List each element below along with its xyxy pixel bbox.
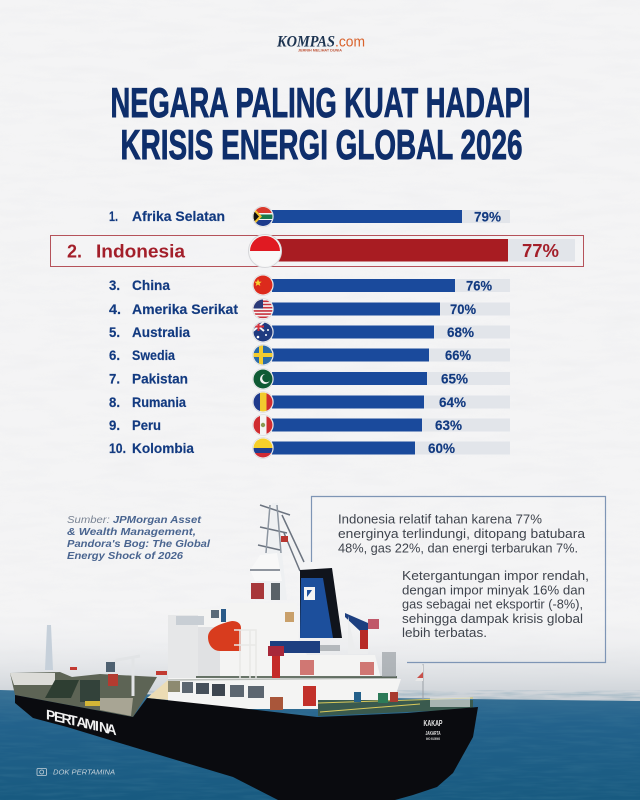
door and aft deck machinery bbox=[270, 664, 473, 716]
paragraph: low import dependency: gas sebagai net eksportir (-8%), bbox=[402, 598, 583, 612]
deck windows bbox=[168, 681, 264, 698]
source citation: Sumber: JPMorgan Asset bbox=[67, 514, 202, 526]
row 4: Amerika Serikat 70%: 70% bbox=[450, 301, 477, 317]
row 8: Rumania 64%: 64% bbox=[439, 394, 467, 410]
row 7: Pakistan 65%: 65% bbox=[441, 370, 469, 386]
sea background bbox=[0, 690, 640, 800]
row 7: Pakistan 65% bbox=[109, 369, 510, 389]
source citation: & Wealth Management, bbox=[67, 526, 196, 538]
paragraph: energy protection: energinya terlindungi, ditopang batubara bbox=[338, 527, 585, 541]
row 3: China 76%: China bbox=[132, 278, 170, 293]
row 10: Kolombia 60%: 60% bbox=[428, 440, 456, 456]
stern name: KAKAP JAKARTA: KAKAP bbox=[424, 719, 443, 728]
paragraph: low import dependency: sehingga dampak krisis global bbox=[402, 612, 583, 626]
row 5: Australia 68%: Australia bbox=[132, 325, 190, 340]
logo: Kompas.com: JERNIH MELIHAT DUNIA bbox=[298, 48, 342, 52]
paragraph: low import dependency bbox=[402, 569, 589, 640]
row 4: Amerika Serikat 70%: Amerika Serikat bbox=[132, 302, 239, 317]
row 5: Australia 68%: 68% bbox=[447, 324, 475, 340]
row 1: Afrika Selatan 79%: Afrika Selatan bbox=[132, 209, 225, 224]
paragraph: energy protection: Indonesia relatif tahan karena 77% bbox=[338, 512, 542, 526]
paragraph: low import dependency: Ketergantungan impor rendah, bbox=[402, 569, 589, 583]
source citation bbox=[67, 514, 211, 562]
stern name: KAKAP JAKARTA bbox=[424, 719, 443, 741]
row 10: Kolombia 60%: 10. bbox=[109, 441, 126, 456]
source citation: Pandora's Bog: The Global bbox=[67, 538, 211, 550]
row 7: Pakistan 65%: 7. bbox=[109, 372, 120, 386]
row 9: Peru 63%: 9. bbox=[109, 418, 120, 433]
row 6: Swedia 66%: 66% bbox=[445, 347, 472, 363]
hull name: PERTAMINA: PERTAMINA bbox=[46, 707, 117, 739]
stern name: KAKAP JAKARTA: IMO 9329980 bbox=[426, 737, 440, 741]
fore mast bbox=[45, 625, 53, 670]
black hull bbox=[15, 695, 478, 800]
photo credit bbox=[37, 768, 115, 776]
funnel bbox=[300, 568, 342, 638]
row 1: Afrika Selatan 79%: 1. bbox=[109, 209, 118, 224]
row 10: Kolombia 60%: Kolombia bbox=[132, 441, 194, 456]
row 10: Kolombia 60% bbox=[109, 438, 510, 458]
row 9: Peru 63% bbox=[109, 415, 510, 435]
row 5: Australia 68%: 5. bbox=[109, 325, 120, 340]
logo: Kompas.com bbox=[276, 34, 365, 52]
red and blue deck cranes bbox=[268, 613, 379, 678]
paragraph: energy protection bbox=[338, 512, 585, 556]
info box bbox=[312, 496, 606, 662]
row 8: Rumania 64%: Rumania bbox=[132, 395, 186, 410]
row 2: Indonesia 77% highlighted: 77% bbox=[522, 241, 559, 261]
title bbox=[110, 79, 530, 168]
row 4: Amerika Serikat 70% bbox=[109, 299, 510, 319]
photo credit: DOK PERTAMINA bbox=[53, 770, 115, 776]
row 3: China 76% bbox=[109, 275, 510, 295]
row 8: Rumania 64%: 8. bbox=[109, 395, 120, 410]
row 2: Indonesia 77% highlighted bbox=[50, 234, 584, 268]
source citation: Energy Shock of 2026 bbox=[67, 550, 183, 562]
row 9: Peru 63%: 63% bbox=[435, 417, 463, 433]
row 9: Peru 63%: Peru bbox=[132, 418, 161, 433]
paragraph: low import dependency: lebih terbatas. bbox=[402, 626, 487, 640]
row 1: Afrika Selatan 79%: 79% bbox=[474, 208, 502, 224]
logo: Kompas.com: .com bbox=[335, 34, 365, 50]
row 6: Swedia 66% bbox=[109, 345, 510, 365]
illustration: Pertamina tanker ship bbox=[10, 503, 478, 800]
row 4: Amerika Serikat 70%: 4. bbox=[109, 302, 121, 317]
row 3: China 76%: 3. bbox=[109, 278, 120, 293]
superstructure bbox=[147, 603, 401, 709]
row 2: Indonesia 77% highlighted: Indonesia bbox=[96, 242, 186, 262]
lifeboat bbox=[208, 621, 256, 678]
row 1: Afrika Selatan 79% bbox=[109, 206, 510, 227]
paragraph: energy protection: 48%, gas 22%, dan energi terbarukan 7%. bbox=[338, 542, 578, 556]
paragraph: low import dependency: dengan impor minyak 16% dan bbox=[402, 584, 585, 598]
row 6: Swedia 66%: Swedia bbox=[132, 348, 175, 363]
mast and radar tower bbox=[250, 503, 304, 600]
row 6: Swedia 66%: 6. bbox=[109, 348, 120, 363]
row 5: Australia 68% bbox=[109, 322, 510, 342]
row 2: Indonesia 77% highlighted: 2. bbox=[67, 242, 82, 262]
row 3: China 76%: 76% bbox=[466, 278, 493, 294]
row 7: Pakistan 65%: Pakistan bbox=[132, 372, 188, 386]
logo: Kompas.com: KOMPAS bbox=[276, 34, 335, 50]
stern name: KAKAP JAKARTA: JAKARTA bbox=[426, 731, 441, 737]
row 8: Rumania 64% bbox=[109, 392, 510, 412]
icon: camera bbox=[37, 768, 46, 776]
fore deck bbox=[10, 656, 167, 717]
ranking bar chart bbox=[50, 206, 584, 458]
